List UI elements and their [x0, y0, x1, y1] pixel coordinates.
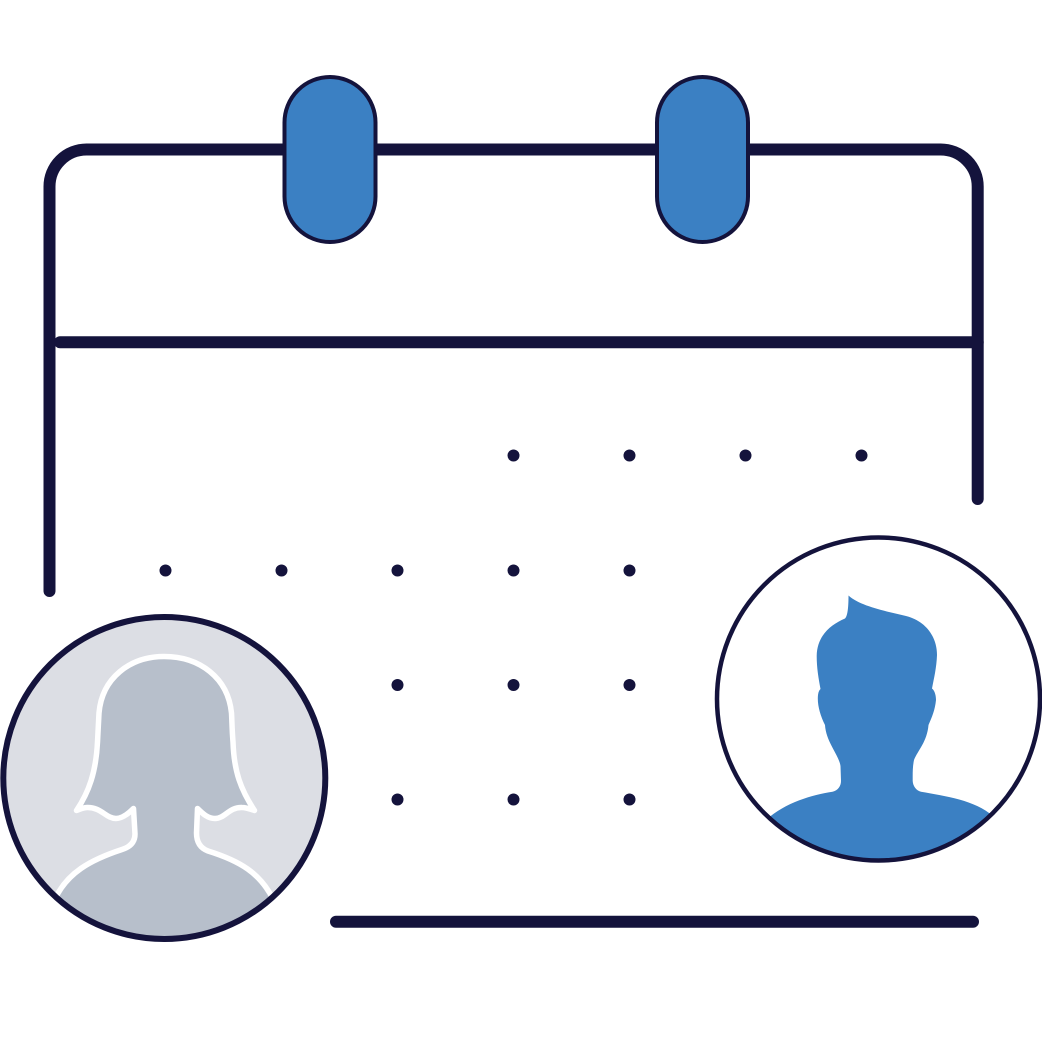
- date dots: [160, 450, 868, 806]
- calendar binding ring left: [284, 77, 376, 242]
- avatar: man: [717, 538, 1040, 880]
- calendar binding ring right: [657, 77, 748, 242]
- calendar frame: [50, 150, 978, 922]
- avatar: woman: [3, 617, 325, 960]
